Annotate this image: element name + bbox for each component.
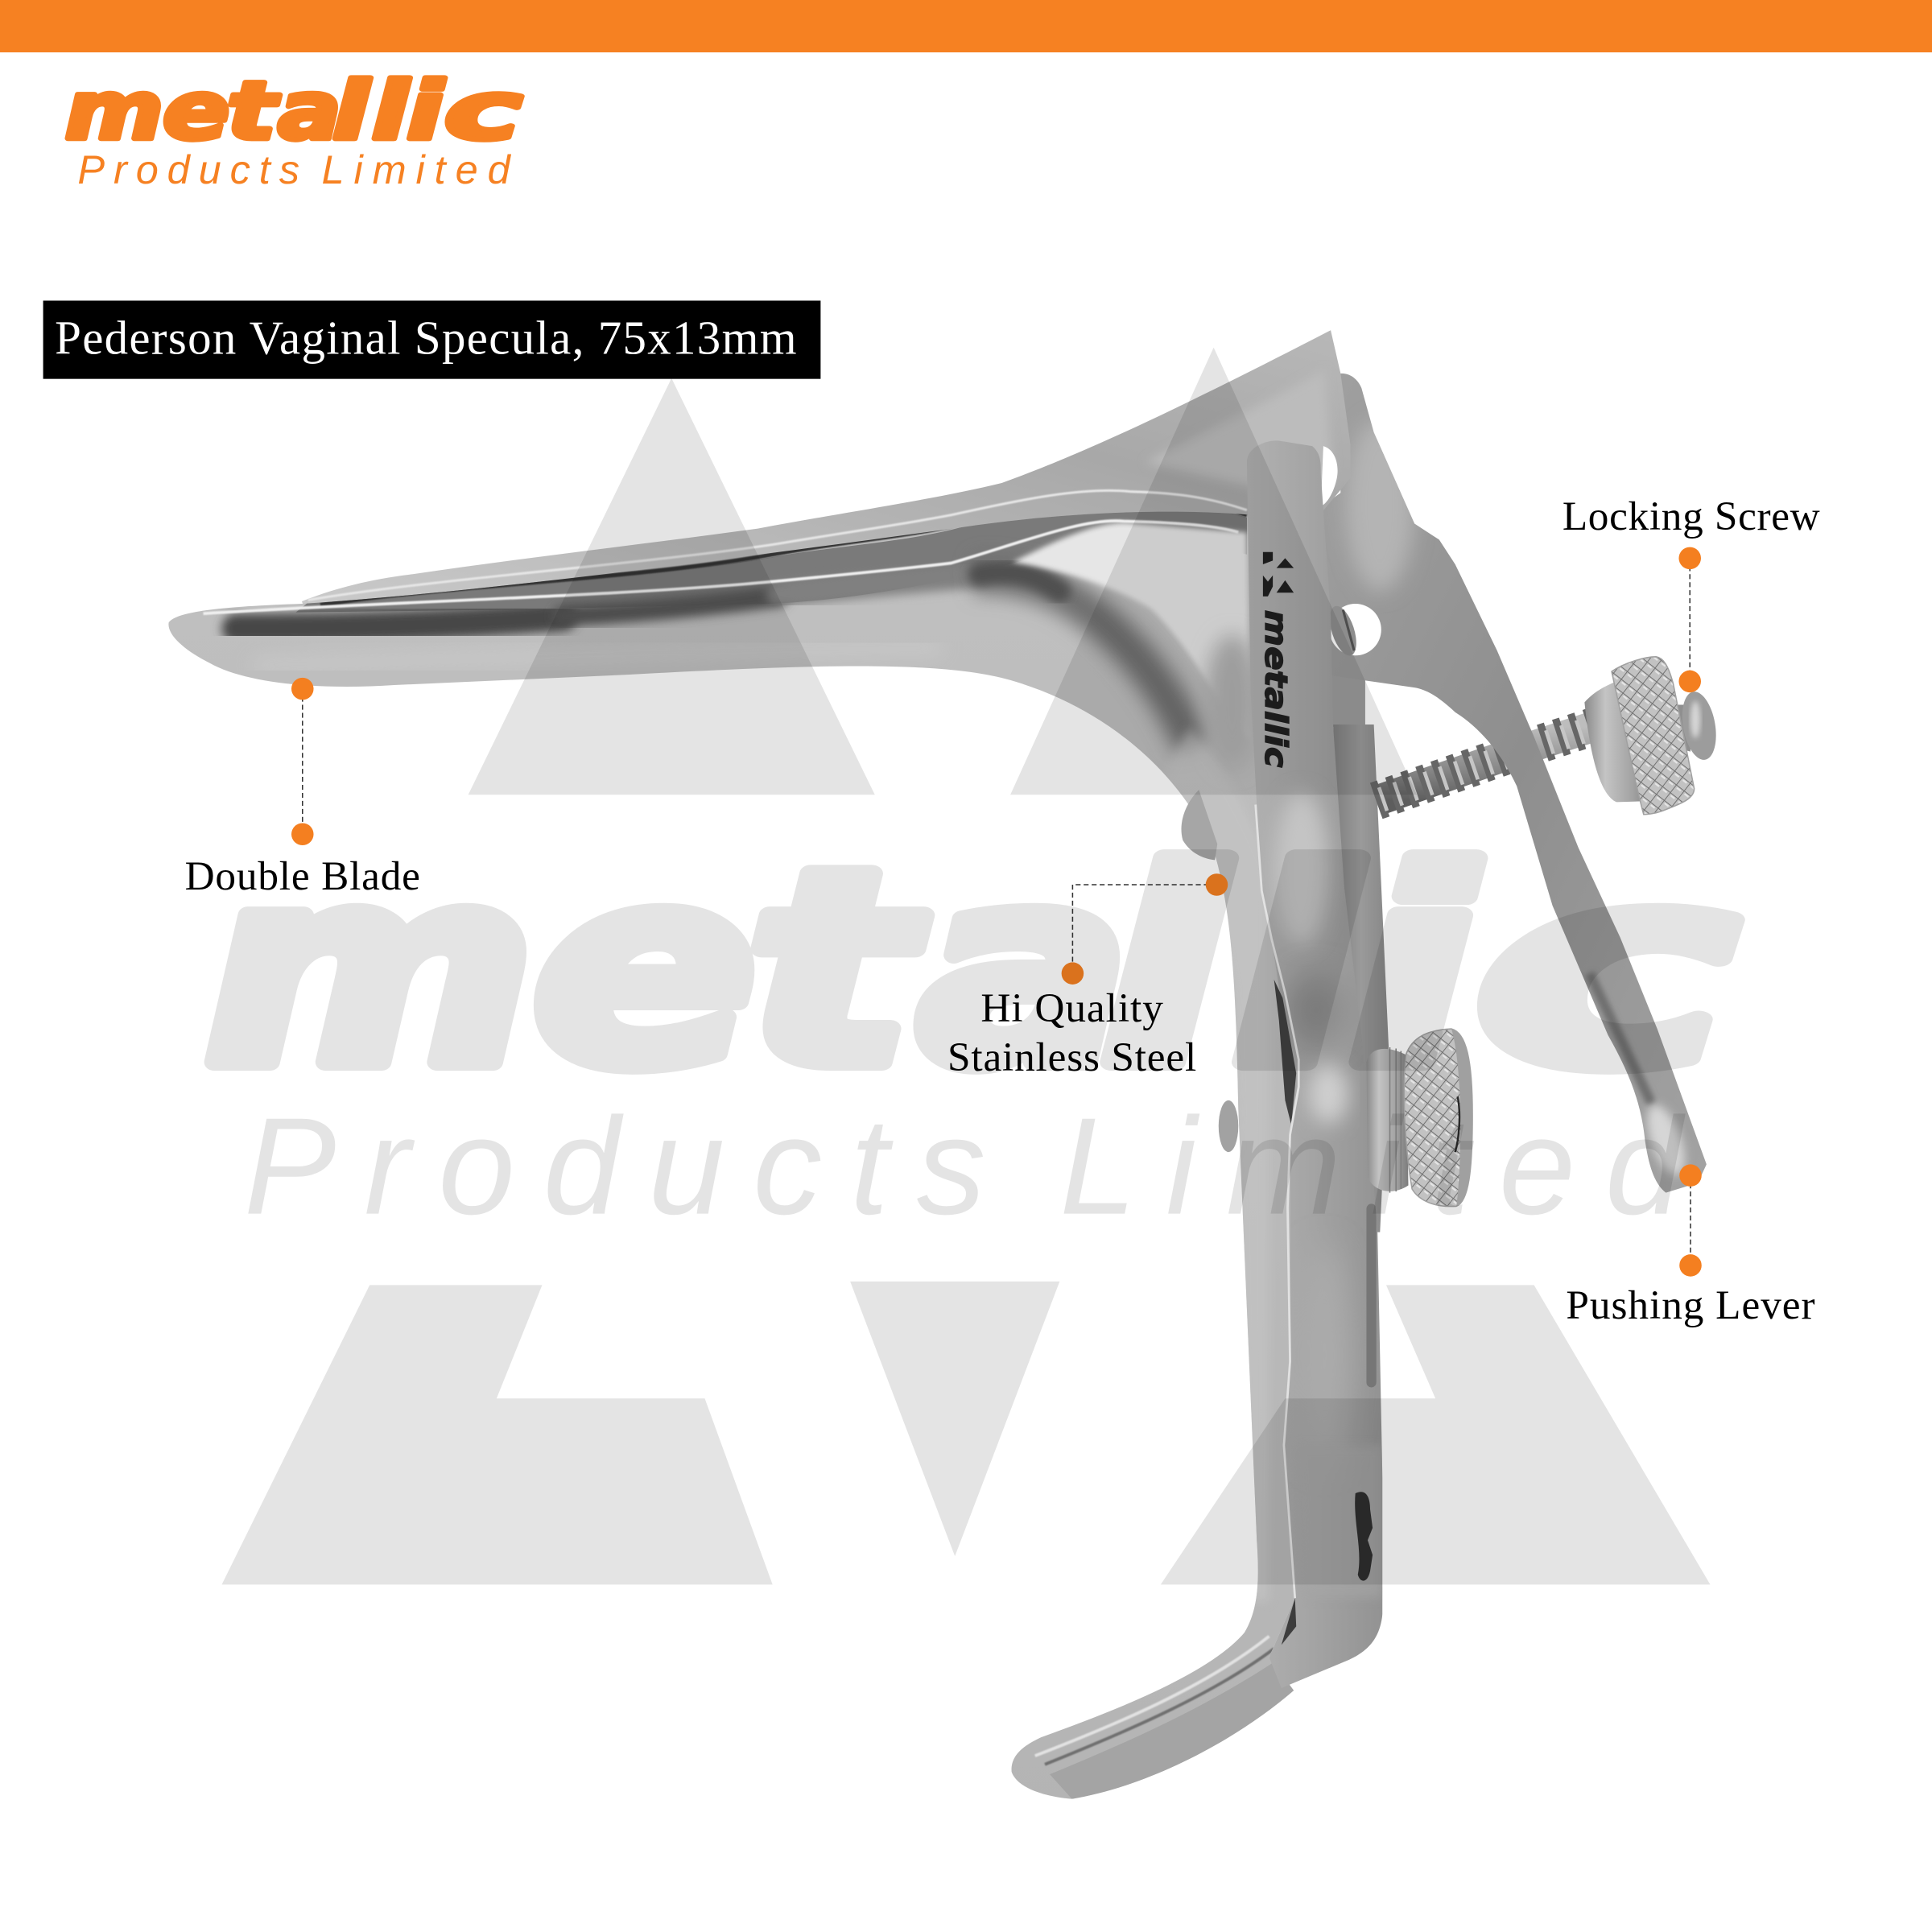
watermark tagline: Limited xyxy=(1059,1090,1686,1244)
lower blade gloss band xyxy=(1050,1657,1294,1799)
logo tagline: Limited xyxy=(321,147,512,192)
lower soft shading xyxy=(1205,634,1259,770)
logo wordmark: l xyxy=(372,65,411,158)
blade 2: upper blade xyxy=(302,330,1351,609)
slot in blade 2 xyxy=(1321,446,1338,506)
hinge hole with screw xyxy=(1324,603,1381,659)
logo wordmark: e xyxy=(163,65,229,158)
callout: Pushing Lever xyxy=(1566,1164,1815,1328)
locking knob collar xyxy=(1584,681,1653,802)
title text: Pederson Vaginal Specula, 75x13mm xyxy=(55,311,797,364)
logo wordmark: m xyxy=(65,65,163,158)
product illustration: speculum xyxy=(148,330,1725,1848)
watermark wordmark: t xyxy=(747,812,926,1125)
watermark lower left shape xyxy=(222,1285,773,1584)
hinge block under bar xyxy=(1328,673,1365,727)
watermark wordmark: l xyxy=(1100,812,1229,1125)
right handle with engraved bar xyxy=(1247,441,1383,1685)
inner column xyxy=(1333,724,1389,1232)
thin highlight line xyxy=(204,521,1238,613)
title banner xyxy=(43,300,820,379)
watermark triangle right xyxy=(1010,348,1417,795)
dark reflection band xyxy=(237,616,563,629)
logo wordmark: c xyxy=(444,65,522,158)
handle seam xyxy=(1256,804,1298,1598)
groove between blades xyxy=(295,500,1247,613)
logo wordmark: i xyxy=(407,65,445,158)
watermark triangle left xyxy=(469,378,875,795)
handle slit xyxy=(1282,1598,1296,1645)
watermark wordmark xyxy=(204,812,1736,1125)
watermark wordmark: a xyxy=(918,812,1130,1125)
pin at left of handle xyxy=(1219,1100,1238,1152)
logo tagline xyxy=(77,147,512,192)
bright triangle xyxy=(1012,519,1249,684)
handle knob knurl xyxy=(1404,1029,1472,1207)
watermark inverted triangle xyxy=(850,1282,1059,1556)
back lobe xyxy=(1181,790,1217,860)
callout: Pushing Lever: Pushing Lever xyxy=(1566,1282,1815,1328)
watermark logo xyxy=(204,348,1736,1584)
engraved logo text: metallic xyxy=(1257,610,1294,768)
locking screw thread xyxy=(1377,727,1592,801)
watermark wordmark: m xyxy=(204,812,535,1125)
logo wordmark: l xyxy=(332,65,371,158)
logo wordmark xyxy=(65,65,522,158)
callout: Double Blade: Double Blade xyxy=(185,853,420,899)
watermark wordmark: l xyxy=(1232,812,1361,1125)
watermark tagline xyxy=(244,1090,1686,1244)
callout: Locking Screw xyxy=(1563,493,1820,692)
watermark lower right shape xyxy=(1161,1285,1710,1584)
callout: Hi Quality Stainless Steel: Hi Quality xyxy=(980,985,1163,1031)
locking screw head xyxy=(1671,689,1721,762)
callout: Locking Screw: Locking Screw xyxy=(1563,493,1820,539)
callout: Hi Quality Stainless Steel xyxy=(947,873,1228,1080)
logo: metallic Products Limited xyxy=(65,65,522,192)
rear hinge lever and pushing lever xyxy=(1323,374,1707,1193)
engraved logo triangles xyxy=(1263,552,1294,597)
locking knob knurl xyxy=(1612,657,1695,815)
top orange bar xyxy=(0,0,1932,52)
engraved mark on handle xyxy=(1355,1492,1373,1581)
watermark wordmark: i xyxy=(1349,812,1478,1125)
logo wordmark: a xyxy=(278,65,341,158)
logo wordmark: t xyxy=(227,65,280,158)
watermark wordmark: e xyxy=(532,812,757,1125)
callout: Hi Quality Stainless Steel: Stainless Steel xyxy=(947,1034,1196,1080)
callout: Double Blade xyxy=(185,678,420,899)
logo tagline: Products xyxy=(77,147,299,192)
watermark tagline: Products xyxy=(244,1090,985,1244)
watermark wordmark: c xyxy=(1475,812,1736,1125)
blade 1 and left handle xyxy=(168,512,1294,1799)
handle knob collar xyxy=(1366,1047,1408,1193)
